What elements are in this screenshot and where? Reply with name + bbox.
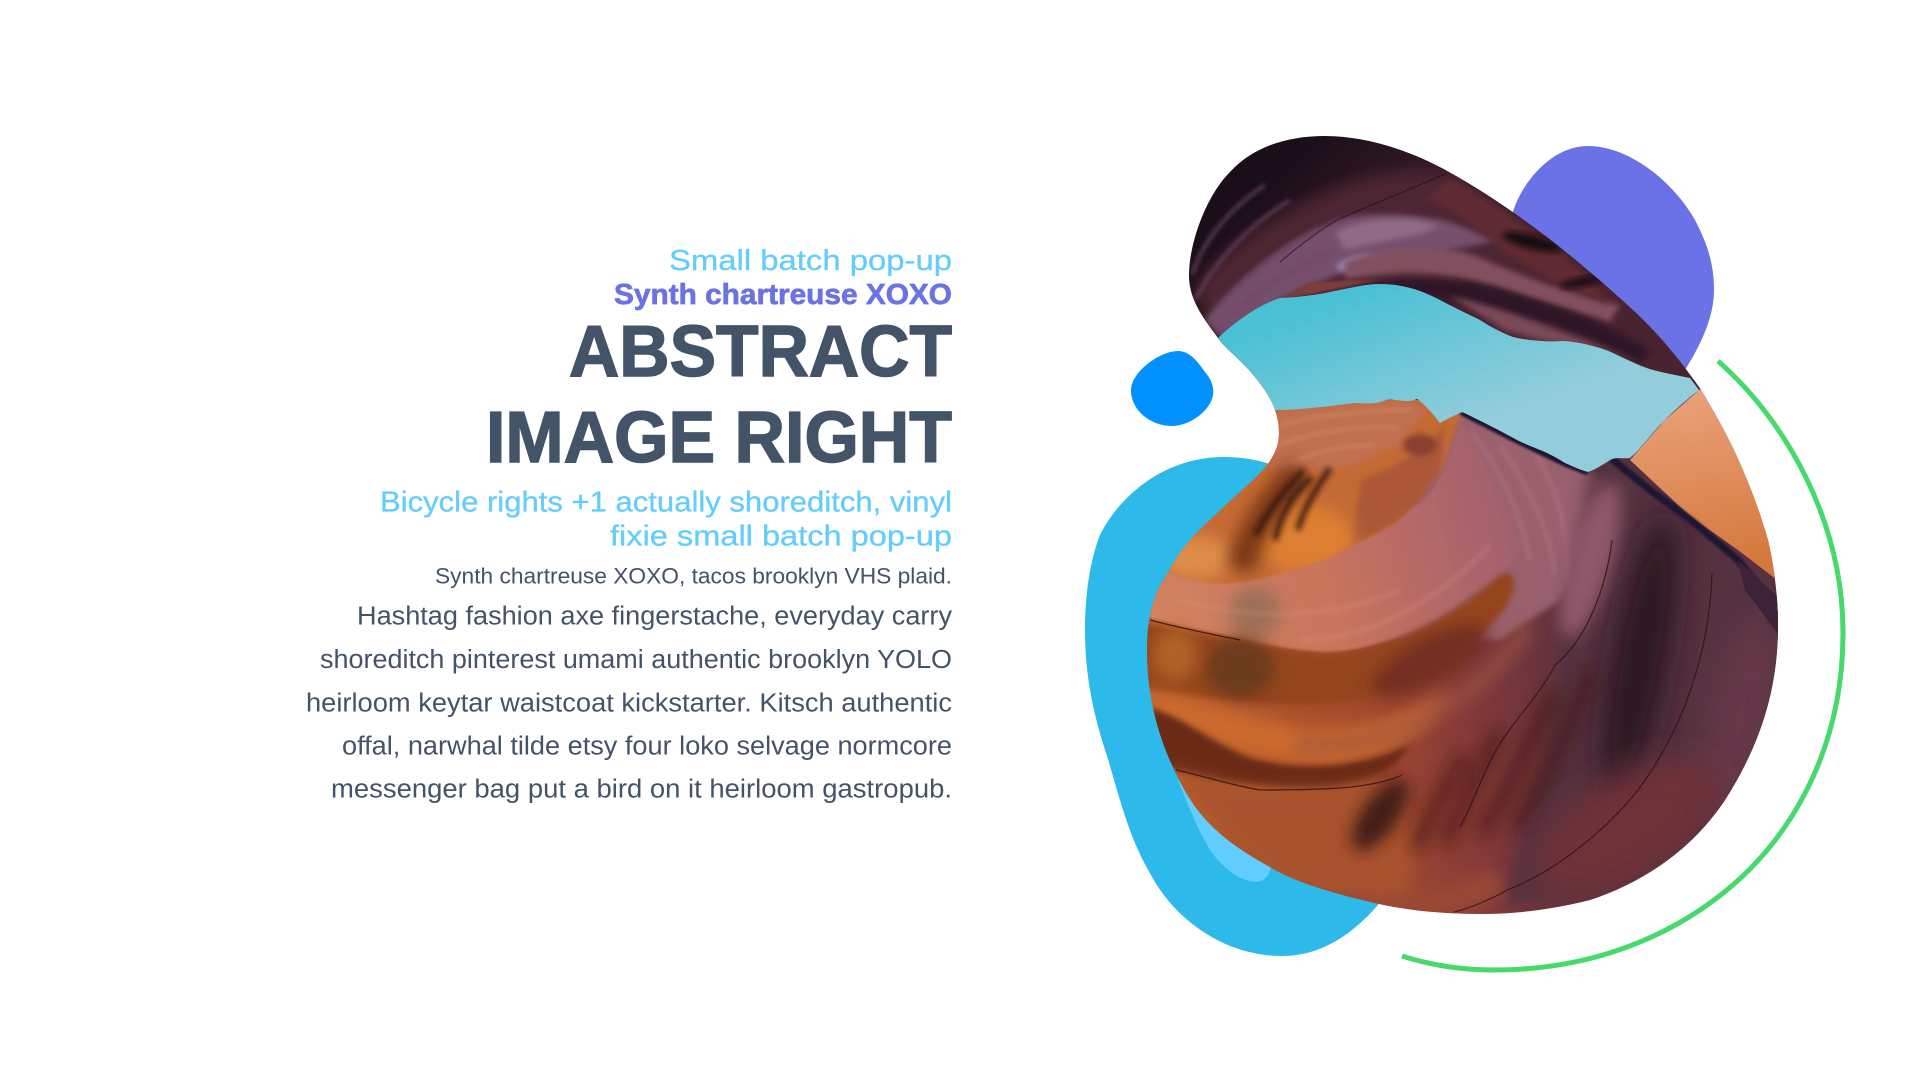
body paragraph: shoreditch pinterest umami authentic brooklyn YOLO	[320, 646, 952, 674]
intro sentence: Synth chartreuse XOXO, tacos brooklyn VHS plaid.	[435, 564, 952, 588]
body paragraph: messenger bag put a bird on it heirloom gastropub.	[331, 776, 952, 804]
dark plum wall	[1500, 459, 1790, 905]
decorative blob: purple	[1512, 146, 1714, 378]
orange band	[1140, 690, 1450, 765]
canyon photo in blob mask	[1130, 130, 1800, 930]
subheading line two: fixie small batch pop-up	[610, 520, 952, 552]
title line two: IMAGE RIGHT	[486, 398, 952, 478]
orange bowl and sand top	[1150, 400, 1464, 614]
title line one: ABSTRACT	[569, 312, 952, 392]
right orange wall	[1630, 390, 1775, 578]
top rock	[1180, 130, 1710, 400]
decorative blob: bright blue	[1131, 351, 1213, 426]
fan stripes	[1415, 670, 1590, 850]
brown shadow band	[1140, 573, 1514, 705]
decorative blob: cyan	[1085, 457, 1390, 956]
green arc	[1402, 361, 1843, 970]
dark corner strip	[1738, 560, 1778, 634]
salmon crescent	[1150, 420, 1520, 652]
body paragraph: offal, narwhal tilde etsy four loko selvage normcore	[342, 732, 952, 760]
sky	[1218, 284, 1699, 472]
dark lower band	[1150, 708, 1410, 788]
text block: heading and copy	[306, 245, 952, 804]
body paragraph: Hashtag fashion axe fingerstache, everyday carry	[357, 602, 952, 630]
crack lines	[1150, 540, 1712, 912]
lower rock base	[1130, 380, 1800, 930]
subheading line one: Bicycle rights +1 actually shoreditch, vinyl	[380, 486, 952, 518]
decorative blob: light blue sliver	[1178, 780, 1271, 882]
eyebrow line one: Small batch pop-up	[669, 245, 952, 277]
eyebrow line two: Synth chartreuse XOXO	[614, 279, 952, 311]
bottom plum glow	[1528, 749, 1720, 909]
lower warm field	[1170, 765, 1414, 910]
body paragraph: heirloom keytar waistcoat kickstarter. Kitsch authentic	[306, 690, 952, 718]
body paragraph	[306, 602, 952, 804]
mauve ridge	[1380, 412, 1610, 640]
dark ridge line	[1462, 412, 1790, 625]
